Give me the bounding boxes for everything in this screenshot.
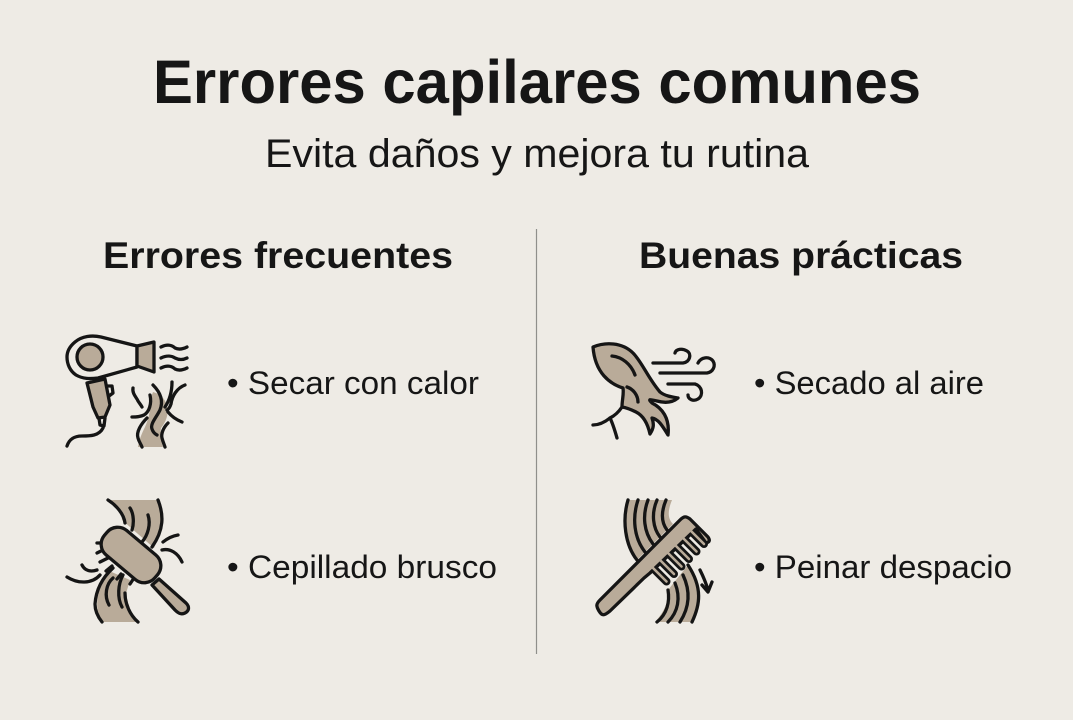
icon: hair dryer and damaged hair [67, 336, 187, 447]
label: peinar despacio: • Peinar despacio [754, 549, 1012, 585]
icon: rough hairbrush [67, 500, 189, 622]
heading: buenas prácticas: Buenas prácticas [639, 235, 963, 276]
vertical divider [536, 229, 538, 654]
subtitle: Evita daños y mejora tu rutina [265, 132, 810, 176]
label: cepillado brusco: • Cepillado brusco [227, 549, 497, 585]
icon: hair air drying [593, 344, 714, 438]
icon: gentle comb [597, 500, 712, 622]
heading: errores frecuentes: Errores frecuentes [103, 235, 453, 276]
label: secar con calor: • Secar con calor [227, 365, 479, 401]
label: secado al aire: • Secado al aire [754, 365, 984, 401]
title: Errores capilares comunes [153, 48, 921, 116]
